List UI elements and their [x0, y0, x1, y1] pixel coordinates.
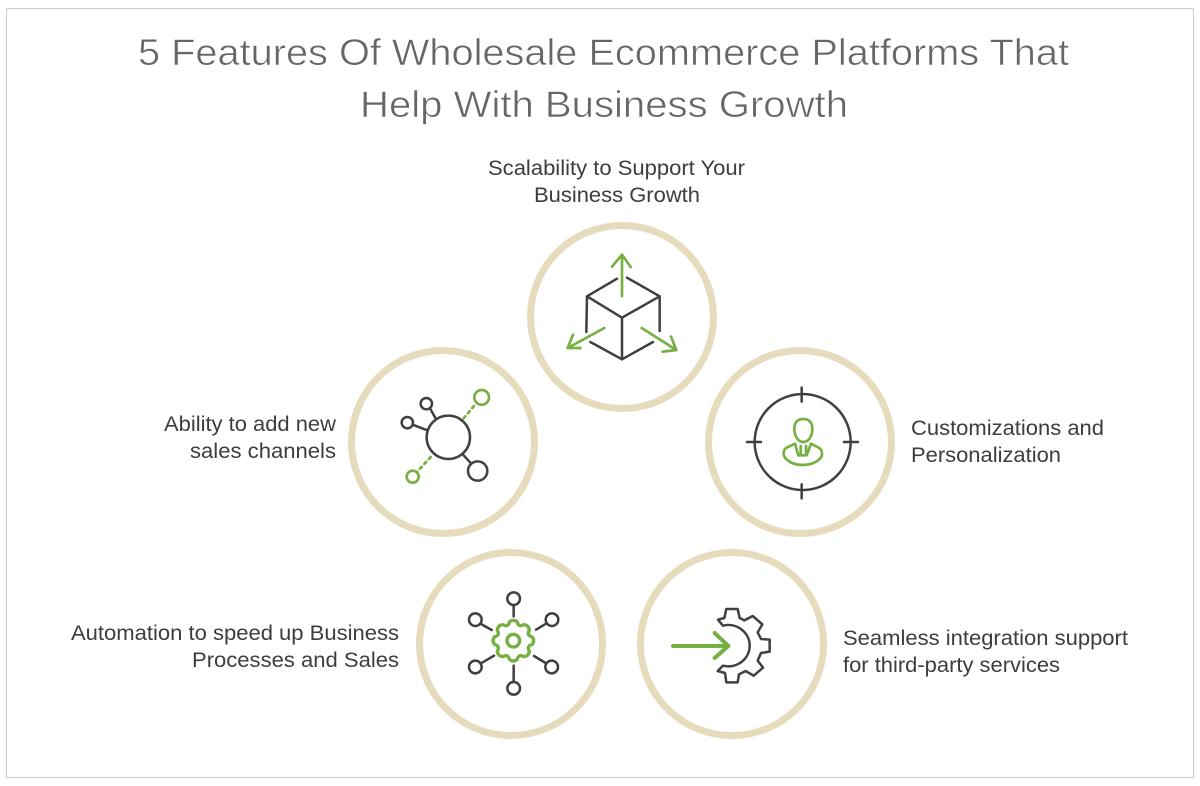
label: customization [911, 417, 1104, 467]
panel: sales channels [164, 350, 534, 534]
panel: customization [708, 350, 1104, 534]
ring: sales channels [352, 350, 534, 534]
label: scalability: Scalability to Support Your [488, 157, 745, 180]
icon: gear with nodes [469, 592, 558, 695]
label: scalability: Business Growth [534, 184, 700, 207]
label: sales channels [164, 413, 337, 463]
title: 5 Features Of Wholesale Ecommerce Platforms That [138, 32, 1070, 73]
label: automation: Automation to speed up Business [71, 622, 399, 645]
label: sales channels: Ability to add new [164, 413, 337, 436]
title: Help With Business Growth [360, 84, 848, 125]
label: integration [843, 627, 1128, 677]
icon: network nodes [402, 390, 489, 483]
panel: integration [640, 552, 1128, 736]
icon: target with person [747, 388, 858, 498]
label: integration: Seamless integration support [843, 627, 1128, 650]
icon: cube with outward arrows [568, 255, 676, 359]
label: automation: Processes and Sales [192, 649, 399, 672]
ring: integration [640, 552, 824, 736]
ring: automation [420, 552, 602, 736]
label: integration: for third-party services [843, 654, 1060, 677]
panel: scalability [488, 157, 745, 408]
label: automation [71, 622, 399, 672]
label: sales channels: sales channels [190, 440, 336, 463]
icon: arrow into gear [673, 609, 770, 682]
label: scalability [488, 157, 745, 207]
ring: scalability [530, 226, 714, 408]
title [138, 32, 1070, 125]
label: customization: Personalization [911, 444, 1061, 467]
ring: customization [708, 350, 892, 534]
panel: automation [71, 552, 602, 736]
label: customization: Customizations and [911, 417, 1104, 440]
